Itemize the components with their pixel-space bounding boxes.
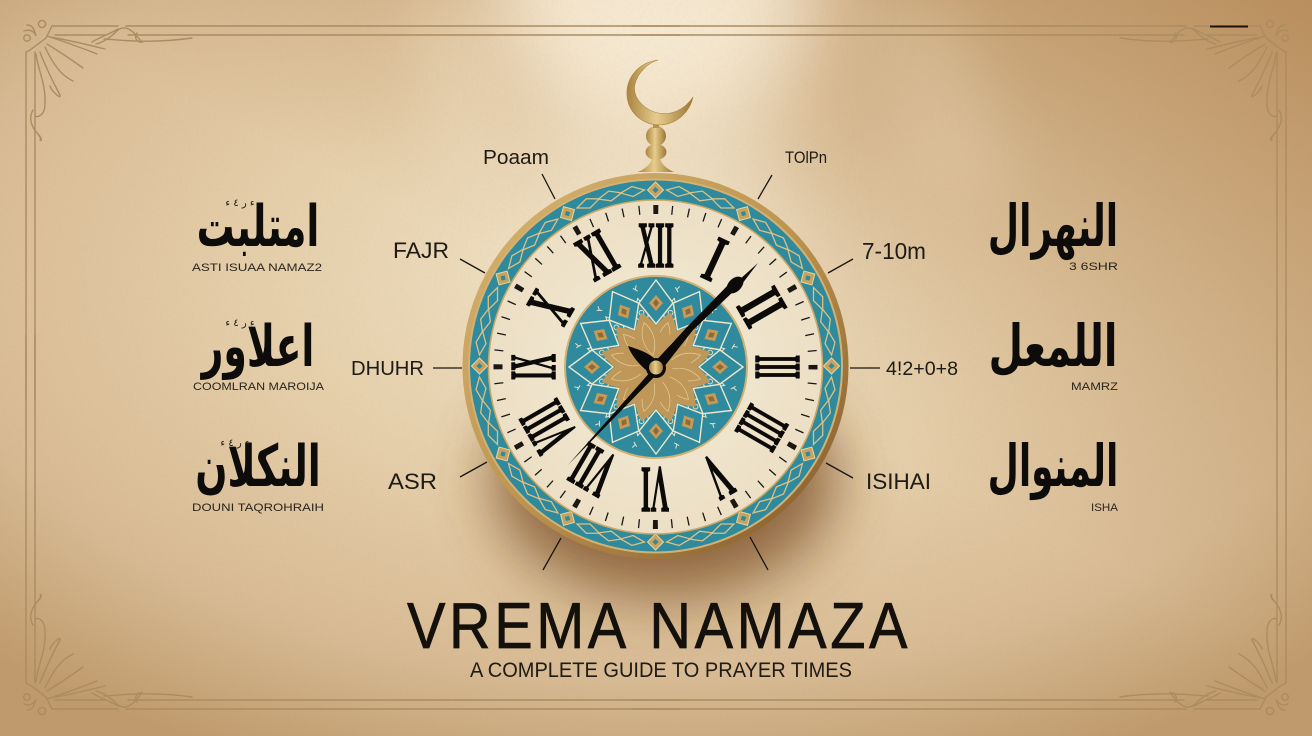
calligraphy 3 with caption: DOUNI TAQROHRAIH — [192, 502, 324, 514]
calligraphy 3 with caption: ء ر ٤ ء — [220, 438, 250, 449]
roman numerals: XII — [638, 209, 674, 282]
left calligraphy column — [192, 194, 325, 514]
clock — [456, 166, 855, 566]
calligraphy 3 with caption: النكلان — [195, 434, 321, 500]
calligraphy 6 with caption: المنوال — [988, 433, 1118, 500]
label: Asr: ASR — [388, 469, 437, 494]
clock shadow — [492, 360, 836, 596]
roman numerals: IX — [497, 354, 570, 380]
label: top left: Poaam — [483, 147, 549, 169]
roman numerals: IIII — [721, 395, 802, 461]
calligraphy 1 with caption: ء ر ٤ ء — [225, 198, 255, 209]
calligraphy 1 with caption: امتلبت — [197, 194, 319, 260]
right calligraphy column — [988, 193, 1119, 514]
roman numerals: I — [693, 223, 737, 295]
roman numerals — [497, 209, 814, 526]
roman numerals: VI — [641, 453, 669, 526]
calligraphy 2 with caption: COOMLRAN MAROIJA — [193, 381, 325, 393]
subtitle: A COMPLETE GUIDE TO PRAYER TIMES — [470, 659, 852, 682]
calligraphy 5 with caption: اللمعل — [989, 312, 1117, 380]
clock hands — [568, 263, 758, 465]
roman numerals: V — [691, 440, 745, 513]
label: Isha: ISIHAI — [866, 469, 931, 494]
label: Dhuhr: DHUHR — [351, 358, 424, 380]
minute ticks — [498, 210, 813, 524]
time labels — [351, 147, 958, 494]
leader lines — [433, 174, 880, 570]
calligraphy 1 with caption: ASTI ISUAA NAMAZ2 — [192, 262, 322, 274]
title: VREMA NAMAZA — [407, 589, 911, 662]
teal ornamental ring — [456, 166, 855, 566]
clock face — [488, 200, 822, 534]
calligraphy 2 with caption: ء ر ٤ ء — [225, 318, 255, 329]
medallion — [565, 276, 747, 458]
roman numerals: III — [741, 355, 814, 379]
label: time two: 4!2+0+8 — [886, 359, 958, 380]
calligraphy 4 with caption: النهرال — [988, 193, 1118, 260]
roman numerals: X — [513, 279, 588, 335]
roman numerals: VIII — [506, 389, 591, 464]
gold outer rim — [462, 173, 848, 559]
calligraphy 6 with caption: ISHA — [1091, 502, 1119, 514]
roman numerals: II — [723, 277, 800, 338]
roman numerals: XI — [565, 216, 629, 295]
label: top right: TOlPn — [785, 148, 827, 167]
icon: crescent moon — [627, 60, 693, 125]
calligraphy 2 with caption: اعلاور — [199, 314, 314, 380]
calligraphy 5 with caption: MAMRZ — [1071, 381, 1118, 393]
label: Fajr: FAJR — [393, 238, 449, 263]
calligraphy 4 with caption: 3 6SHR — [1069, 261, 1118, 273]
label: time one: 7-10m — [862, 238, 926, 264]
roman numerals: VII — [559, 428, 628, 511]
clock finial with crescent — [627, 60, 693, 172]
